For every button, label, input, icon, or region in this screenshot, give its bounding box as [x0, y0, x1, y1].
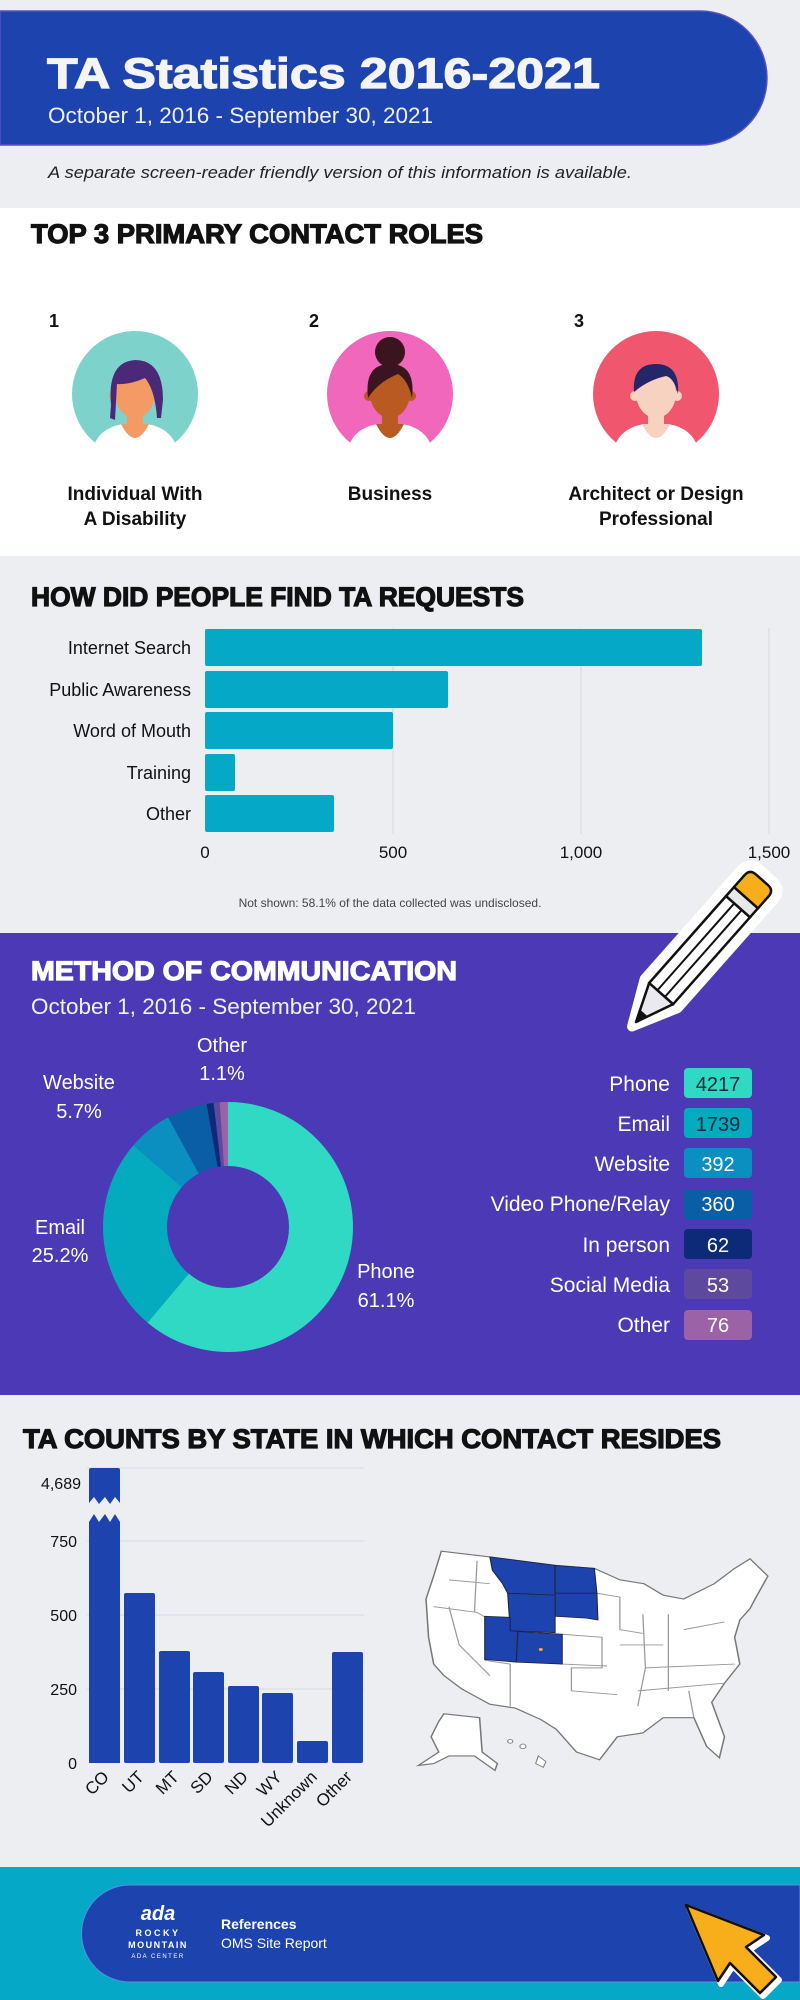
role 3: Architect or Design [568, 484, 744, 505]
bar chart: states: Unknown [257, 1767, 321, 1831]
panel: top 3 contact roles [0, 208, 800, 556]
bar chart: states: UT [118, 1767, 148, 1797]
legend: communication counts: 53 [707, 1275, 729, 1297]
legend: communication counts: 4217 [696, 1074, 740, 1096]
role 1: Individual With [68, 484, 202, 505]
title: TA Statistics 2016-2021 [47, 50, 600, 98]
map: US states served [418, 1551, 768, 1770]
bar chart: referral sources: Word of Mouth [73, 721, 191, 741]
heading: how did people find: HOW DID PEOPLE FIND TA REQUESTS [31, 582, 524, 612]
donut labels: 1.1% [199, 1063, 245, 1085]
bar chart: states: 750 [50, 1534, 77, 1551]
panel: method of communication [0, 861, 800, 1395]
references text [221, 1916, 327, 1951]
bar chart: referral sources: 0 [200, 843, 210, 862]
legend: communication counts: Phone [609, 1073, 670, 1096]
heading: method: METHOD OF COMMUNICATION [31, 956, 457, 986]
note: undisclosed: Not shown: 58.1% of the data collected was undisclosed. [239, 896, 541, 910]
bar chart: referral sources: Training [127, 763, 191, 783]
subtitle date: October 1, 2016 - September 30, 2021 [48, 103, 433, 128]
donut labels: Other [197, 1035, 247, 1057]
bar chart: referral sources: 1,000 [560, 843, 602, 862]
legend: communication counts: Email [617, 1113, 670, 1136]
bar chart: referral sources [49, 628, 790, 862]
bar chart: states: Other [312, 1767, 356, 1811]
donut labels: 25.2% [32, 1245, 89, 1267]
role 2: 2 [309, 311, 319, 331]
legend: communication counts: Website [595, 1153, 670, 1176]
role 1 [49, 311, 205, 530]
donut labels: Website [43, 1072, 115, 1094]
legend: communication counts: 360 [701, 1194, 735, 1216]
donut chart [135, 1134, 321, 1320]
donut labels: 61.1% [358, 1290, 415, 1312]
role 2 [309, 311, 460, 505]
bar chart: referral sources: Other [146, 804, 191, 824]
header banner [0, 11, 767, 145]
donut labels [32, 1035, 415, 1312]
bar chart: states: 4,689 [41, 1476, 81, 1493]
bar chart: states: SD [187, 1767, 217, 1798]
bar chart: states: CO [81, 1767, 113, 1799]
donut labels: Email [35, 1217, 85, 1239]
legend: communication counts: 76 [707, 1315, 729, 1337]
donut labels: 5.7% [56, 1101, 102, 1123]
bar chart: states: ND [221, 1767, 252, 1798]
legend: communication counts: Social Media [550, 1274, 670, 1297]
bar chart: states: 0 [68, 1756, 77, 1773]
heading: top 3: TOP 3 PRIMARY CONTACT ROLES [31, 219, 483, 249]
role 1: 1 [49, 311, 59, 331]
bar chart: states: MT [152, 1767, 183, 1798]
bar chart: states: 250 [50, 1682, 77, 1699]
references text: References [221, 1916, 297, 1932]
icon: cursor [686, 1905, 779, 1996]
panel: counts by state [23, 1424, 768, 1831]
note: screen reader: A separate screen-reader friendly version of this information is available. [47, 163, 632, 182]
panel: how people found TA [31, 582, 790, 910]
legend: communication counts: In person [582, 1234, 670, 1257]
logo: Rocky Mountain ADA Center: MOUNTAIN [128, 1940, 188, 1950]
bar chart: states: WY [253, 1767, 286, 1800]
bar chart: states: 500 [50, 1608, 77, 1625]
icon: pencil [616, 861, 782, 1041]
legend: communication counts: Video Phone/Relay [491, 1193, 670, 1216]
bar chart: referral sources: 500 [379, 843, 407, 862]
bar chart: referral sources: Internet Search [68, 638, 191, 658]
logo: Rocky Mountain ADA Center: ROCKY [135, 1928, 181, 1938]
subtitle date: October 1, 2016 - September 30, 2021 [31, 994, 416, 1019]
role 3 [568, 311, 744, 530]
bar chart: referral sources: 1,500 [748, 843, 790, 862]
legend: communication counts: 1739 [696, 1114, 740, 1136]
legend: communication counts [491, 1068, 752, 1340]
footer [0, 1867, 800, 2000]
logo: Rocky Mountain ADA Center [128, 1903, 188, 1960]
role 3: Professional [599, 509, 713, 530]
bar chart: states [41, 1468, 364, 1831]
logo: Rocky Mountain ADA Center: ADA CENTER [131, 1954, 185, 1960]
references text: OMS Site Report [221, 1935, 327, 1951]
role 2: Business [348, 484, 432, 505]
role 1: A Disability [84, 509, 187, 530]
heading: counts by state: TA COUNTS BY STATE IN WHICH CONTACT RESIDES [23, 1424, 721, 1454]
legend: communication counts: 392 [701, 1154, 735, 1176]
donut labels: Phone [357, 1261, 415, 1283]
legend: communication counts: Other [617, 1314, 670, 1337]
role 3: 3 [574, 311, 584, 331]
logo: Rocky Mountain ADA Center: ada [141, 1903, 175, 1925]
legend: communication counts: 62 [707, 1235, 729, 1257]
bar chart: referral sources: Public Awareness [49, 680, 191, 700]
